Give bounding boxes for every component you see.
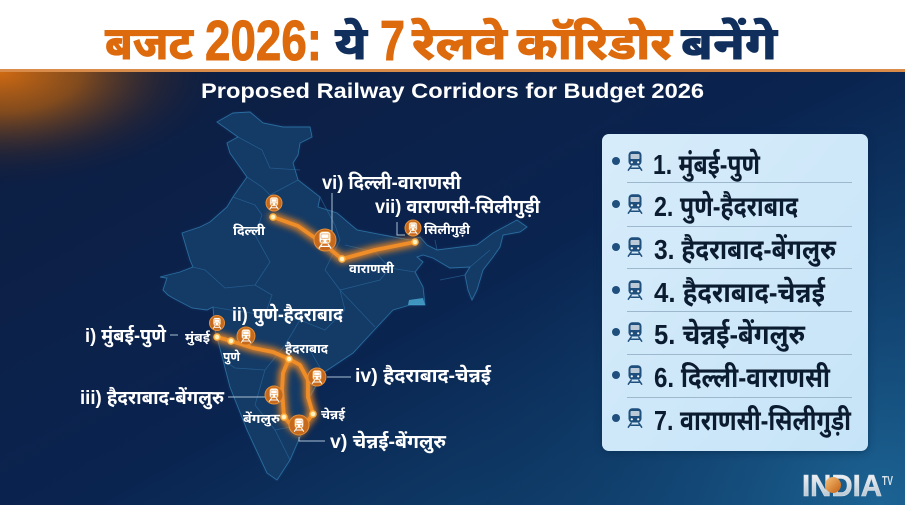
city labels bbox=[185, 222, 471, 428]
list item 5: 5. चेन्नई-बेंगलुरु bbox=[654, 317, 806, 352]
logo: India TV: INDIA bbox=[802, 468, 882, 503]
list item 7: 7. वाराणसी-सिलीगुड़ी bbox=[654, 404, 852, 438]
city labels: सिलीगुड़ी bbox=[424, 222, 471, 239]
corridor label ii: ii) पुणे-हैदराबाद bbox=[232, 303, 343, 327]
title text: ये bbox=[335, 16, 368, 69]
list item 1: 1. मुंबई-पुणे bbox=[653, 147, 760, 182]
corridor label iii: iii) हैदराबाद-बेंगलुरु bbox=[80, 386, 225, 410]
title text: बजट bbox=[105, 17, 194, 69]
station icons bbox=[210, 195, 421, 435]
title text: रेलवे bbox=[411, 16, 508, 69]
title text: 7 bbox=[380, 9, 405, 73]
title text: बनेंगे bbox=[681, 16, 779, 69]
city labels: बेंगलुरु bbox=[243, 411, 281, 428]
railway routes bbox=[217, 217, 415, 432]
logo: India TV: TV bbox=[882, 473, 893, 488]
panel: corridor list bbox=[602, 134, 868, 452]
title text bbox=[105, 9, 779, 73]
city labels: चेन्नई bbox=[321, 407, 346, 422]
corridor label vi: vi) दिल्ली-वाराणसी bbox=[322, 172, 461, 194]
corridor label i: i) मुंबई-पुणे bbox=[85, 324, 167, 348]
corridor label iv: iv) हैदराबाद-चेन्नई bbox=[355, 364, 492, 387]
city labels: दिल्ली bbox=[233, 223, 266, 238]
list item 4: 4. हैदराबाद-चेन्नई bbox=[654, 275, 826, 308]
map of India bbox=[160, 112, 527, 480]
map labels bbox=[80, 172, 540, 454]
list item 3: 3. हैदराबाद-बेंगलुरु bbox=[654, 233, 837, 267]
city labels: हैदराबाद bbox=[285, 341, 329, 356]
title text: 2026: bbox=[205, 9, 322, 73]
corridor label vii: vii) वाराणसी-सिलीगुड़ी bbox=[375, 196, 540, 219]
list item 6: 6. दिल्ली-वाराणसी bbox=[654, 361, 831, 393]
route nodes bbox=[214, 214, 418, 420]
leader lines bbox=[170, 193, 405, 441]
title banner bbox=[0, 0, 905, 73]
city labels: वाराणसी bbox=[349, 261, 395, 276]
list item 2: 2. पुणे-हैदराबाद bbox=[654, 189, 799, 224]
city labels: मुंबई bbox=[185, 330, 211, 347]
subtitle: Proposed Railway Corridors for Budget 2026 bbox=[201, 80, 704, 103]
corridor label v: v) चेन्नई-बेंगलुरु bbox=[330, 430, 447, 454]
title text: कॉरिडोर bbox=[517, 17, 673, 69]
city labels: पुणे bbox=[223, 349, 240, 366]
